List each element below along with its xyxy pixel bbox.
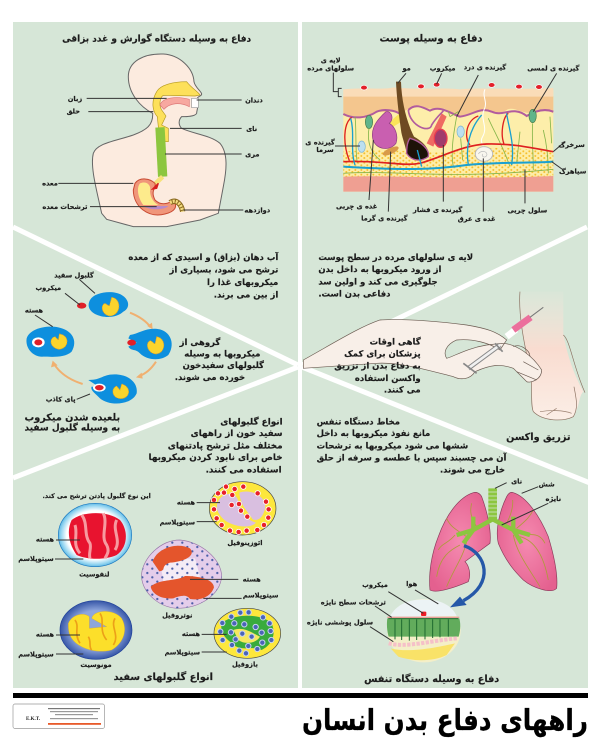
text: mucus: ششها می شود میکروبها به ترشحات — [317, 441, 468, 451]
footer rule — [13, 693, 588, 698]
cycle labels: هسته — [25, 307, 43, 315]
panel: saliva and phagocytosis — [25, 251, 283, 476]
lung labels — [307, 477, 561, 642]
text: antibodies: استفاده می کنند. — [206, 466, 282, 476]
text: dead skin cells: دفاعی بدن است. — [318, 290, 391, 300]
skin labels: لایه ی — [321, 57, 341, 65]
skin labels: غده ی عرق — [458, 215, 496, 223]
cycle labels: پای کاذب — [46, 395, 76, 403]
digestive organs — [133, 82, 200, 215]
cell labels: سیتوپلاسم — [165, 648, 200, 656]
illustration: injection — [303, 292, 585, 420]
text: phagocytes — [175, 337, 264, 383]
text: antibodies: خاص برای نابود کردن میکروبها — [149, 453, 283, 463]
text: vaccine: واکسن استفاده — [355, 374, 421, 384]
skin labels: سلولهای مرده — [307, 65, 354, 73]
text: phagocytes: میکروبها به وسیله — [184, 350, 260, 360]
text: saliva: ترشح می شود، بسیاری از — [169, 266, 278, 276]
heading: engulfing — [25, 412, 120, 434]
panel: white blood cell types — [18, 482, 281, 683]
cell labels: هسته — [36, 631, 54, 639]
cell: eosinophil — [209, 482, 276, 535]
text: dead skin cells: از ورود میکروبها به داخل بدن — [318, 265, 442, 275]
text: antibodies — [149, 415, 283, 476]
organ labels: ترشحات معده — [42, 203, 88, 211]
organ labels — [42, 95, 271, 215]
cell labels: نوتروفیل — [162, 611, 193, 619]
cycle labels: میکروب — [35, 284, 61, 292]
cell: basophil — [214, 608, 281, 658]
illustration: airway detail — [387, 599, 461, 662]
cell labels: هسته — [177, 498, 195, 506]
panel: digestive defence — [42, 33, 271, 227]
heading: vaccination: تزریق واکسن — [506, 432, 570, 443]
cycle labels: گلبول سفید — [54, 271, 94, 280]
main title: راههای دفاع بدن انسان — [302, 704, 588, 738]
lung labels: هوا — [406, 580, 418, 588]
cell labels: هسته — [36, 536, 54, 544]
heading: skin: دفاع به وسیله پوست — [379, 34, 483, 45]
text: saliva — [128, 251, 279, 301]
skin labels: مو — [402, 65, 411, 73]
text: vaccine — [334, 336, 421, 396]
cell labels: مونوسیت — [80, 661, 112, 669]
cell: neutrophil — [142, 540, 222, 608]
text: saliva: از بین می برند. — [214, 291, 278, 301]
text: vaccine: می کنند. — [384, 386, 421, 396]
text: mucus — [317, 416, 508, 476]
heading: digestive: دفاع به وسیله دستگاه گوارش و غدد بزاقی — [62, 33, 252, 45]
text: phagocytes: گلبولهای سفیدخون — [183, 360, 264, 371]
organ labels: معده — [42, 179, 58, 187]
lung labels: ترشحات سطح نایژه — [321, 598, 386, 606]
text: mucus: مانع نفوذ میکروبها به داخل — [317, 429, 430, 439]
cycle labels — [25, 271, 95, 403]
lung labels: سلول پوششی نایژه — [307, 619, 373, 627]
skin labels: گیرنده ی لمسی — [527, 63, 580, 72]
body silhouette — [92, 54, 226, 227]
cell labels: ائوزینوفیل — [227, 539, 263, 547]
heading: engulfing: بلعیده شدن میکروب — [25, 412, 120, 423]
panel: skin defence — [305, 34, 586, 223]
logo box: E.K.T. — [26, 717, 41, 722]
skin labels: میکروب — [430, 65, 455, 73]
skin labels: سرخرگ — [558, 140, 585, 149]
text: phagocytes: خورده می شوند. — [175, 373, 245, 383]
arrow: lung to detail — [450, 546, 484, 607]
organ labels: مری — [245, 151, 259, 159]
heading: cell types: انواع گلبولهای سفید — [114, 671, 213, 683]
skin labels: سیاهرگ — [559, 167, 586, 176]
text: saliva: میکروبهای غذا را — [207, 278, 278, 288]
heading: engulfing: به وسیله گلبول سفید — [25, 422, 120, 434]
panel: vaccination — [303, 253, 585, 476]
organ labels: نای — [246, 125, 257, 133]
text: saliva: آب دهان (بزاق) و اسیدی که از معده — [128, 251, 279, 263]
microbes on skin — [361, 82, 542, 90]
text: antibodies: انواع گلبولهای — [220, 415, 283, 427]
skin labels: گیرنده ی فشار — [412, 205, 462, 214]
organ labels: حلق — [67, 108, 80, 116]
cell labels: سیتوپلاسم — [18, 555, 54, 563]
skin cross-section — [343, 82, 553, 192]
skin labels: غده ی چربی — [336, 203, 377, 211]
note: antibody: این نوع گلبول پادتن ترشح می کند. — [43, 492, 151, 500]
lung labels: نایژه — [546, 495, 561, 503]
cell: monocyte — [60, 601, 132, 659]
text: dead skin cells: جلوگیری می کند و اولین سد — [318, 276, 438, 287]
cell labels: سیتوپلاسم — [243, 592, 278, 600]
heading: respiratory: دفاع به وسیله دستگاه تنفس — [364, 673, 499, 685]
cell labels: هسته — [243, 576, 261, 584]
skin labels: سلول چربی — [507, 207, 547, 215]
cell labels: هسته — [182, 630, 200, 638]
text: vaccine: به دفاع بدن از تزریق — [334, 362, 421, 372]
skin labels: گیرنده ی درد — [464, 63, 506, 72]
text: vaccine: پزشکان برای کمک — [344, 350, 421, 360]
text: vaccine: گاهی اوقات — [370, 336, 421, 347]
organ labels: دوازدهه — [244, 207, 271, 215]
text: phagocytes: گروهی از — [179, 337, 220, 348]
cell labels: لنفوسیت — [79, 571, 110, 579]
logo box — [13, 704, 104, 728]
lung labels: شش — [539, 481, 555, 489]
cell labels — [18, 498, 278, 669]
lung labels: میکروب — [362, 581, 388, 589]
text: mucus: مخاط دستگاه تنفس — [317, 416, 400, 427]
text: dead skin cells: لایه ی سلولهای مرده در سطح پوست — [318, 253, 473, 263]
illustration: lungs — [430, 488, 557, 591]
skin labels — [305, 57, 586, 223]
cell labels: بازوفیل — [232, 661, 258, 669]
text: antibodies: سفید خون از راههای — [191, 429, 283, 439]
organ labels: زبان — [68, 95, 82, 103]
text: dead skin cells — [318, 253, 473, 300]
cell labels: سیتوپلاسم — [18, 651, 54, 659]
panel: respiratory defence — [307, 477, 561, 685]
skin labels: گیرنده ی گرما — [361, 213, 408, 222]
text: mucus: آن می چسبند سپس با عطسه و سرفه از حلق — [317, 452, 508, 464]
phagocytosis cycle — [26, 292, 172, 404]
skin labels: گیرنده ی — [305, 137, 335, 146]
cell labels: سیتوپلاسم — [160, 518, 195, 526]
organ labels: دندان — [245, 97, 263, 105]
skin labels: سرما — [316, 146, 334, 154]
text: mucus: خارج می شوند. — [440, 466, 505, 476]
lung labels: نای — [511, 477, 522, 485]
text: antibodies: مختلف مثل ترشح پادتنهای — [168, 441, 283, 451]
cell: lymphocyte — [58, 503, 132, 567]
